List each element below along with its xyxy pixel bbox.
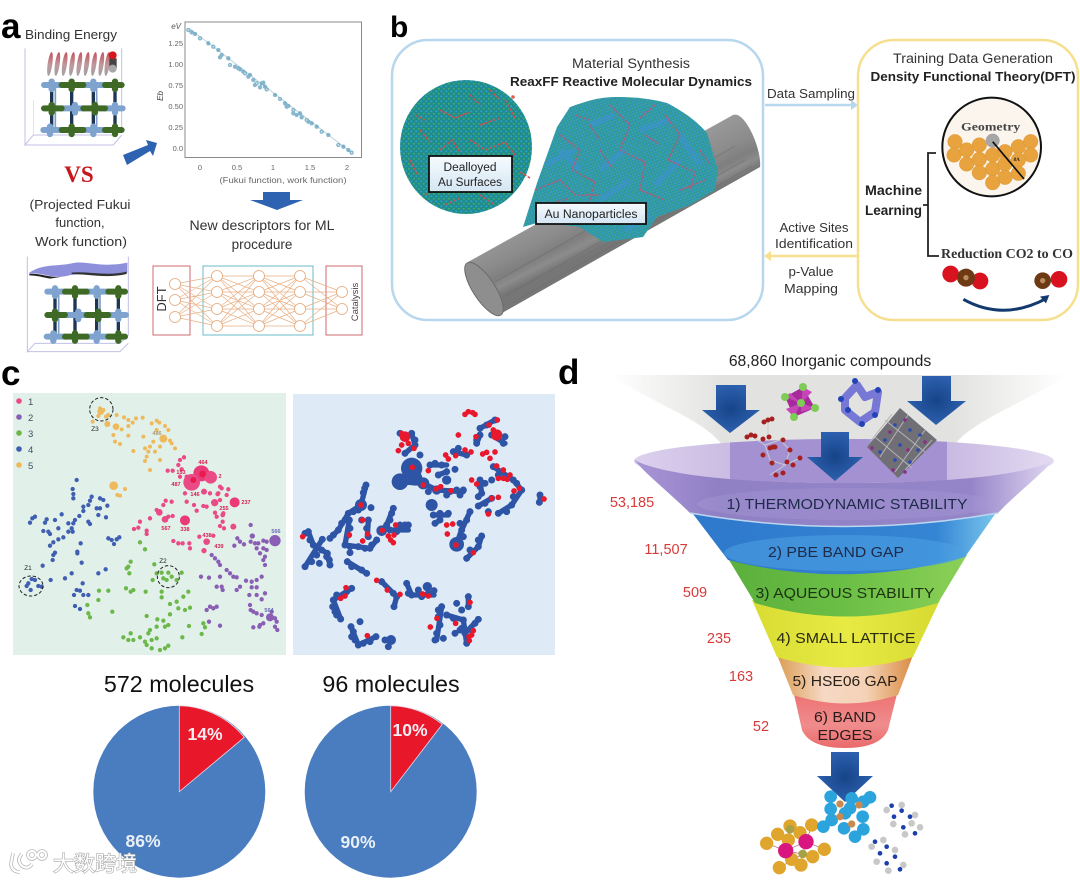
funnel stage labels: 1) THERMODYNAMIC STABILITY	[726, 496, 968, 513]
watermark: 大数跨境	[53, 848, 137, 878]
data point labels secondary: 486	[152, 431, 162, 437]
icon: geometry circle with atoms: Geometry	[961, 119, 1020, 133]
label: dealloyed Au surfaces	[429, 156, 512, 192]
funnel stage 3: aqueous stability	[726, 555, 967, 616]
funnel stage 4: small lattice	[752, 600, 940, 668]
data point labels: 338	[180, 527, 190, 533]
data point labels: 464	[198, 460, 209, 466]
data point labels secondary	[152, 431, 281, 614]
illustration: carbon nanotube	[458, 115, 760, 321]
funnel stage labels: 4) SMALL LATTICE	[776, 630, 916, 647]
text: projected Fukui function, work function: function,	[55, 215, 105, 230]
diagram: neural network: DFT	[154, 286, 169, 312]
chart: binding energy scatter: 1	[271, 163, 275, 172]
heading: 68,860 inorganic compounds: 68,860 Inorganic compounds	[729, 353, 931, 370]
funnel stage 2: PBE band gap	[690, 510, 998, 574]
red points	[303, 412, 544, 641]
chart: binding energy scatter: 2	[345, 163, 349, 172]
chart: binding energy scatter: Eb	[156, 91, 165, 101]
cluster 4 points	[27, 480, 119, 609]
blue points	[305, 420, 540, 647]
arrow: left intake	[702, 385, 760, 433]
funnel red counts: 52	[753, 719, 769, 735]
icon: geometry circle with atoms: 8A	[1014, 158, 1020, 163]
zone labels	[24, 426, 167, 572]
chart: binding energy scatter: 0.0	[173, 144, 183, 153]
heading: material synthesis: ReaxFF Reactive Molecular Dynamics	[510, 74, 752, 89]
data point labels: 439	[214, 544, 224, 550]
data point labels secondary: 566	[271, 529, 281, 535]
legend: 3	[28, 429, 33, 440]
panel: material synthesis	[392, 40, 763, 321]
data point labels: 567	[161, 526, 171, 532]
icon: magenta and green compound	[781, 383, 819, 421]
molecule: cyan and orange	[823, 797, 870, 837]
molecule: gold and magenta	[767, 825, 824, 868]
text: machine learning with bracket: Learning	[865, 203, 922, 218]
arrow: lattice to chart	[123, 140, 157, 165]
heading: binding energy: Binding Energy	[25, 27, 118, 42]
data point labels: 237	[241, 500, 251, 506]
chart: binding energy scatter: 0.75	[168, 81, 183, 90]
chart: binding energy scatter: 0	[198, 163, 202, 172]
funnel stage 1: thermodynamic stability	[634, 460, 1054, 526]
legend: 4	[28, 445, 33, 456]
funnel stage labels: 5) HSE06 GAP	[792, 673, 898, 690]
data point labels	[161, 460, 251, 550]
zone labels: Z2	[159, 558, 167, 565]
chart: binding energy scatter: 0.5	[232, 163, 242, 172]
funnel stage 5: HSE06 gap	[775, 650, 915, 704]
funnel red counts: 53,185	[610, 495, 654, 511]
chart: binding energy scatter: 1.25	[168, 39, 183, 48]
text: new descriptors for ML procedure: New descriptors for ML	[190, 218, 335, 233]
label: Au nanoparticles	[536, 203, 646, 224]
chart: binding energy scatter	[156, 22, 362, 185]
panel label b: b	[390, 11, 408, 44]
funnel rim	[634, 439, 1054, 483]
funnel red counts: 11,507	[644, 542, 688, 558]
arrow: down to descriptors	[250, 192, 303, 210]
icon: CO2 to CO molecules	[942, 266, 1067, 310]
cluster 3 points	[87, 542, 205, 650]
chart: active molecule map	[293, 394, 555, 655]
legend: 2	[28, 413, 33, 424]
panel c: molecule clustering	[1, 354, 555, 878]
data point labels: 487	[171, 482, 181, 488]
cluster 2 points	[201, 525, 281, 630]
heading: material synthesis	[510, 56, 752, 89]
watermark	[11, 848, 137, 878]
illustration: Au nanoparticles	[523, 97, 718, 242]
text: VS: VS	[64, 162, 94, 187]
panel a: descriptors for machine learning	[1, 7, 362, 352]
icon: binding energy lattice model	[25, 48, 123, 145]
icon: output molecules	[767, 797, 920, 871]
funnel intake shading	[610, 375, 1067, 480]
panel label c: c	[1, 354, 20, 393]
legend: 5	[28, 461, 33, 472]
molecule: white and blue ring lower	[872, 840, 903, 871]
data point labels: 255	[219, 506, 229, 512]
panel d: compound screening funnel	[558, 353, 1067, 871]
funnel red counts: 235	[707, 631, 731, 647]
chart: binding energy scatter: 0.50	[168, 102, 183, 111]
pie chart title: 572 molecules: 572 molecules	[104, 671, 254, 697]
icon: red atom compound	[747, 419, 800, 475]
funnel stage labels: EDGES	[818, 727, 872, 744]
funnel stage labels: 3) AQUEOUS STABILITY	[756, 585, 934, 602]
data point labels secondary: 564	[264, 608, 275, 614]
text: reduction CO2 to CO: Reduction CO2 to CO	[941, 247, 1073, 262]
text: machine learning with bracket: Machine	[865, 183, 923, 198]
funnel stage labels	[726, 496, 968, 744]
funnel red counts	[610, 495, 769, 735]
icon: Fukui function lattice model	[27, 257, 128, 352]
arrow: data sampling: Data Sampling	[767, 86, 855, 101]
pie chart title: 96 molecules: 96 molecules	[322, 671, 460, 697]
arrow: data sampling	[765, 86, 858, 110]
pie chart: 96 molecules 10 percent	[305, 706, 477, 878]
zone labels: Z3	[91, 426, 99, 433]
text: projected Fukui function, work function	[30, 197, 131, 249]
funnel red counts: 509	[683, 585, 707, 601]
funnel stage labels: 2) PBE BAND GAP	[768, 544, 904, 561]
chart: binding energy scatter: eV	[171, 22, 182, 31]
heading: material synthesis: Material Synthesis	[572, 56, 690, 71]
data point labels: 146	[190, 492, 200, 498]
pie chart: 572 molecules 14 percent: 86%	[125, 831, 161, 851]
arrow: active sites identification and p-value mapping: p-Value	[788, 264, 834, 279]
label: Au nanoparticles: Au Nanoparticles	[544, 209, 638, 221]
zone labels: Z1	[24, 565, 32, 572]
cluster 1 points	[134, 457, 240, 553]
arrow: funnel output	[817, 752, 873, 802]
label: dealloyed Au surfaces: Dealloyed	[444, 162, 496, 174]
heading: training data generation	[870, 51, 1076, 84]
icon: blue ring compound	[841, 381, 878, 424]
icon: grey framework compound	[867, 408, 937, 478]
cluster 5 points	[93, 408, 175, 496]
pie chart: 572 molecules 14 percent: 14%	[187, 724, 223, 744]
panel label d: d	[558, 353, 579, 392]
arrow: centre intake	[807, 432, 863, 481]
funnel stage 6: band edges	[793, 690, 898, 748]
chart: binding energy scatter: 0.25	[168, 123, 183, 132]
panel b: active site workflow	[390, 11, 1078, 321]
chart: cluster map	[13, 393, 286, 655]
legend	[16, 397, 33, 472]
text: new descriptors for ML procedure	[190, 218, 335, 252]
data point labels: 153	[176, 470, 186, 476]
chart: binding energy scatter: (Fukui function, work function)	[220, 175, 347, 185]
pie chart: 96 molecules 10 percent: 90%	[340, 832, 376, 852]
icon: geometry circle with atoms	[942, 98, 1041, 196]
panel label a: a	[1, 7, 21, 46]
heading: training data generation: Training Data Generation	[893, 51, 1053, 66]
label: dealloyed Au surfaces: Au Surfaces	[438, 177, 502, 189]
arrow: right intake	[907, 376, 966, 425]
molecule: white and blue ring upper	[887, 805, 920, 834]
funnel red counts: 163	[729, 669, 753, 685]
legend: 1	[28, 397, 33, 408]
dashed zone circles Z1 Z2 Z3	[19, 398, 179, 596]
pie chart: 96 molecules 10 percent: 10%	[392, 720, 428, 740]
text: projected Fukui function, work function: (Projected Fukui	[30, 197, 131, 212]
text: new descriptors for ML procedure: procedure	[232, 237, 292, 252]
arrow: active sites identification and p-value mapping: Active Sites	[780, 220, 849, 235]
chart: binding energy scatter: 1.00	[168, 60, 183, 69]
funnel stage labels: 6) BAND	[814, 709, 876, 726]
data point labels: 438	[202, 533, 212, 539]
arrow: active sites identification and p-value mapping: Identification	[775, 236, 853, 251]
diagram: neural network	[153, 266, 362, 335]
arrow: active sites identification and p-value mapping	[764, 220, 857, 296]
data point labels: 2	[218, 474, 222, 480]
diagram: neural network: Catalysis	[350, 282, 361, 321]
text: projected Fukui function, work function: Work function)	[35, 234, 127, 249]
illustration: dealloyed Au sphere	[400, 80, 532, 214]
heading: training data generation: Density Functional Theory(DFT)	[870, 69, 1076, 84]
panel: training data generation	[858, 40, 1078, 320]
pie chart: 572 molecules 14 percent	[93, 706, 265, 878]
chart: binding energy scatter: 1.5	[305, 163, 315, 172]
text: machine learning with bracket	[865, 153, 939, 256]
arrow: active sites identification and p-value mapping: Mapping	[784, 281, 838, 296]
